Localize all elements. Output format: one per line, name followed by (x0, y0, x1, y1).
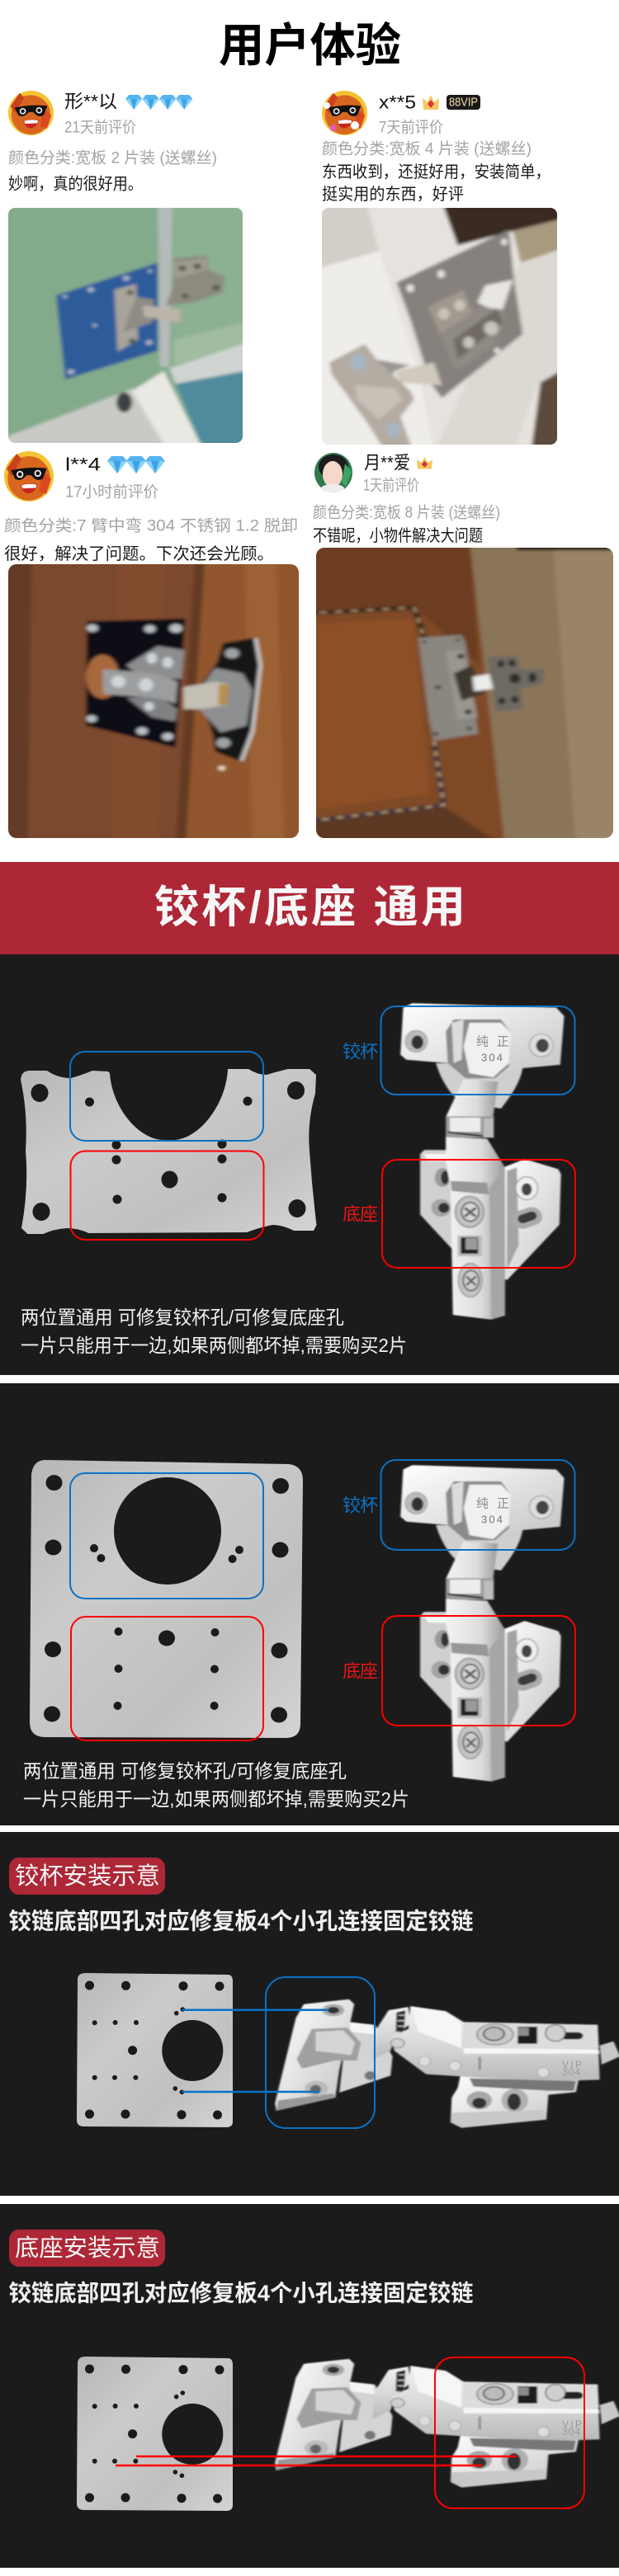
avatar (322, 91, 367, 135)
review card 4 (304, 452, 619, 846)
vertical hinge (400, 1465, 565, 1782)
review text: 很好，解决了问题。下次还会光顾。 (4, 544, 274, 563)
caption line 2: 一片只能用于一边,如果两侧都坏掉,需要购买2片 (21, 1335, 407, 1356)
highlight box: hinge cup (381, 1006, 574, 1095)
highlight box: hinge base (435, 2357, 584, 2508)
caption line 1: 两位置通用 可修复铰杯孔/可修复底座孔 (23, 1760, 347, 1782)
photo: plate on wood drawer (316, 548, 613, 838)
panel: wide plate, cup and base (0, 1383, 619, 1825)
review card 3 (0, 451, 312, 846)
instruction heading: 铰链底部四孔对应修复板4个小孔连接固定铰链 (8, 1909, 474, 1933)
photo: blue plate on green cabinet (8, 208, 243, 443)
review date: 1天前评价 (363, 477, 419, 495)
vertical hinge: 纯正 (476, 1496, 509, 1511)
review text: 不错呢，小物件解决大问题 (313, 526, 483, 545)
badge: 底座安装示意 (9, 2230, 165, 2267)
highlight box: hinge base (382, 1616, 575, 1726)
highlight box: base area on plate (71, 1617, 263, 1740)
horizontal hinge (275, 1999, 619, 2128)
banner: 铰杯/底座 通用 (0, 862, 619, 954)
vertical hinge: 纯正 (476, 1034, 509, 1049)
label: 底座: 底座 (343, 1204, 378, 1224)
review date: 21天前评价 (64, 119, 136, 137)
hinge mark text (562, 2418, 582, 2437)
panel: half plate, cup and base (0, 954, 619, 1375)
hinge mark text: VIP (562, 2059, 582, 2070)
review date: 17小时前评价 (65, 483, 158, 502)
connector lines (182, 2010, 328, 2092)
photo: black plate on wood (8, 564, 299, 838)
user name: x**5 (379, 92, 416, 112)
repair plate (77, 2357, 233, 2511)
title: 用户体验: 用户体验 (219, 20, 401, 71)
diamond badges (107, 456, 165, 473)
crown badge (423, 95, 439, 110)
highlight box: hinge cup (266, 1977, 375, 2128)
label: 底座: 底座 (343, 1661, 378, 1681)
avatar (4, 451, 54, 502)
product variant: 颜色分类:宽板 8 片装 (送螺丝) (313, 503, 500, 521)
hinge mark text: VIP (562, 2418, 582, 2430)
user name: 形**以 (64, 91, 117, 112)
review text line 2: 挺实用的东西，好评 (322, 185, 464, 204)
horizontal hinge (275, 2359, 619, 2488)
user name: 月**爱 (364, 452, 410, 473)
connector lines (116, 2456, 517, 2465)
avatar (314, 453, 352, 492)
crown badge (417, 457, 432, 469)
avatar (8, 91, 54, 135)
instruction heading: 铰链底部四孔对应修复板4个小孔连接固定铰链 (8, 2280, 474, 2306)
review card 1 (8, 91, 243, 443)
vertical hinge (400, 1003, 565, 1320)
user name: l**4 (65, 454, 101, 475)
badge: 底座安装示意: 底座安装示意 (15, 2235, 160, 2262)
highlight box: hinge base (382, 1160, 575, 1268)
highlight box: base hole on plate (71, 1151, 264, 1240)
label: 铰杯: 铰杯 (343, 1495, 378, 1516)
product variant: 颜色分类:宽板 2 片装 (送螺丝) (8, 148, 217, 167)
review date: 7天前评价 (379, 119, 443, 137)
highlight box: cup hole on plate (70, 1052, 263, 1141)
wide plate (30, 1460, 303, 1738)
88VIP badge: 88VIP (449, 96, 478, 109)
hinge mark text: 304 (562, 2426, 580, 2437)
review text: 妙啊，真的很好用。 (8, 175, 143, 193)
diamond badges (125, 95, 192, 110)
product variant: 颜色分类:7 臂中弯 304 不锈钢 1.2 脱卸 (4, 516, 298, 535)
photo: plate on white cabinet (322, 208, 557, 445)
highlight box: cup area on plate (70, 1473, 263, 1599)
panel: cup installation (0, 1832, 619, 2196)
caption line 1: 两位置通用 可修复铰杯孔/可修复底座孔 (21, 1307, 344, 1328)
half plate (21, 1069, 317, 1234)
repair plate (77, 1973, 233, 2127)
badge: 铰杯安装示意 (9, 1858, 165, 1895)
product variant: 颜色分类:宽板 4 片装 (送螺丝) (322, 140, 532, 158)
review text: 东西收到，还挺好用，安装简单， (322, 162, 550, 181)
caption line 2: 一片只能用于一边,如果两侧都坏掉,需要购买2片 (23, 1788, 409, 1810)
vertical hinge: 304 (481, 1051, 503, 1064)
review card 2 (322, 91, 557, 445)
hinge mark text: 304 (562, 2066, 580, 2078)
vertical hinge: 304 (481, 1513, 503, 1526)
hinge mark text (562, 2059, 582, 2078)
banner: 铰杯/底座 通用: 铰杯/底座 通用 (154, 883, 465, 932)
highlight box: hinge cup (381, 1460, 574, 1550)
panel: base installation (0, 2204, 619, 2568)
label: 铰杯: 铰杯 (343, 1041, 378, 1062)
badge: 铰杯安装示意: 铰杯安装示意 (15, 1863, 160, 1890)
